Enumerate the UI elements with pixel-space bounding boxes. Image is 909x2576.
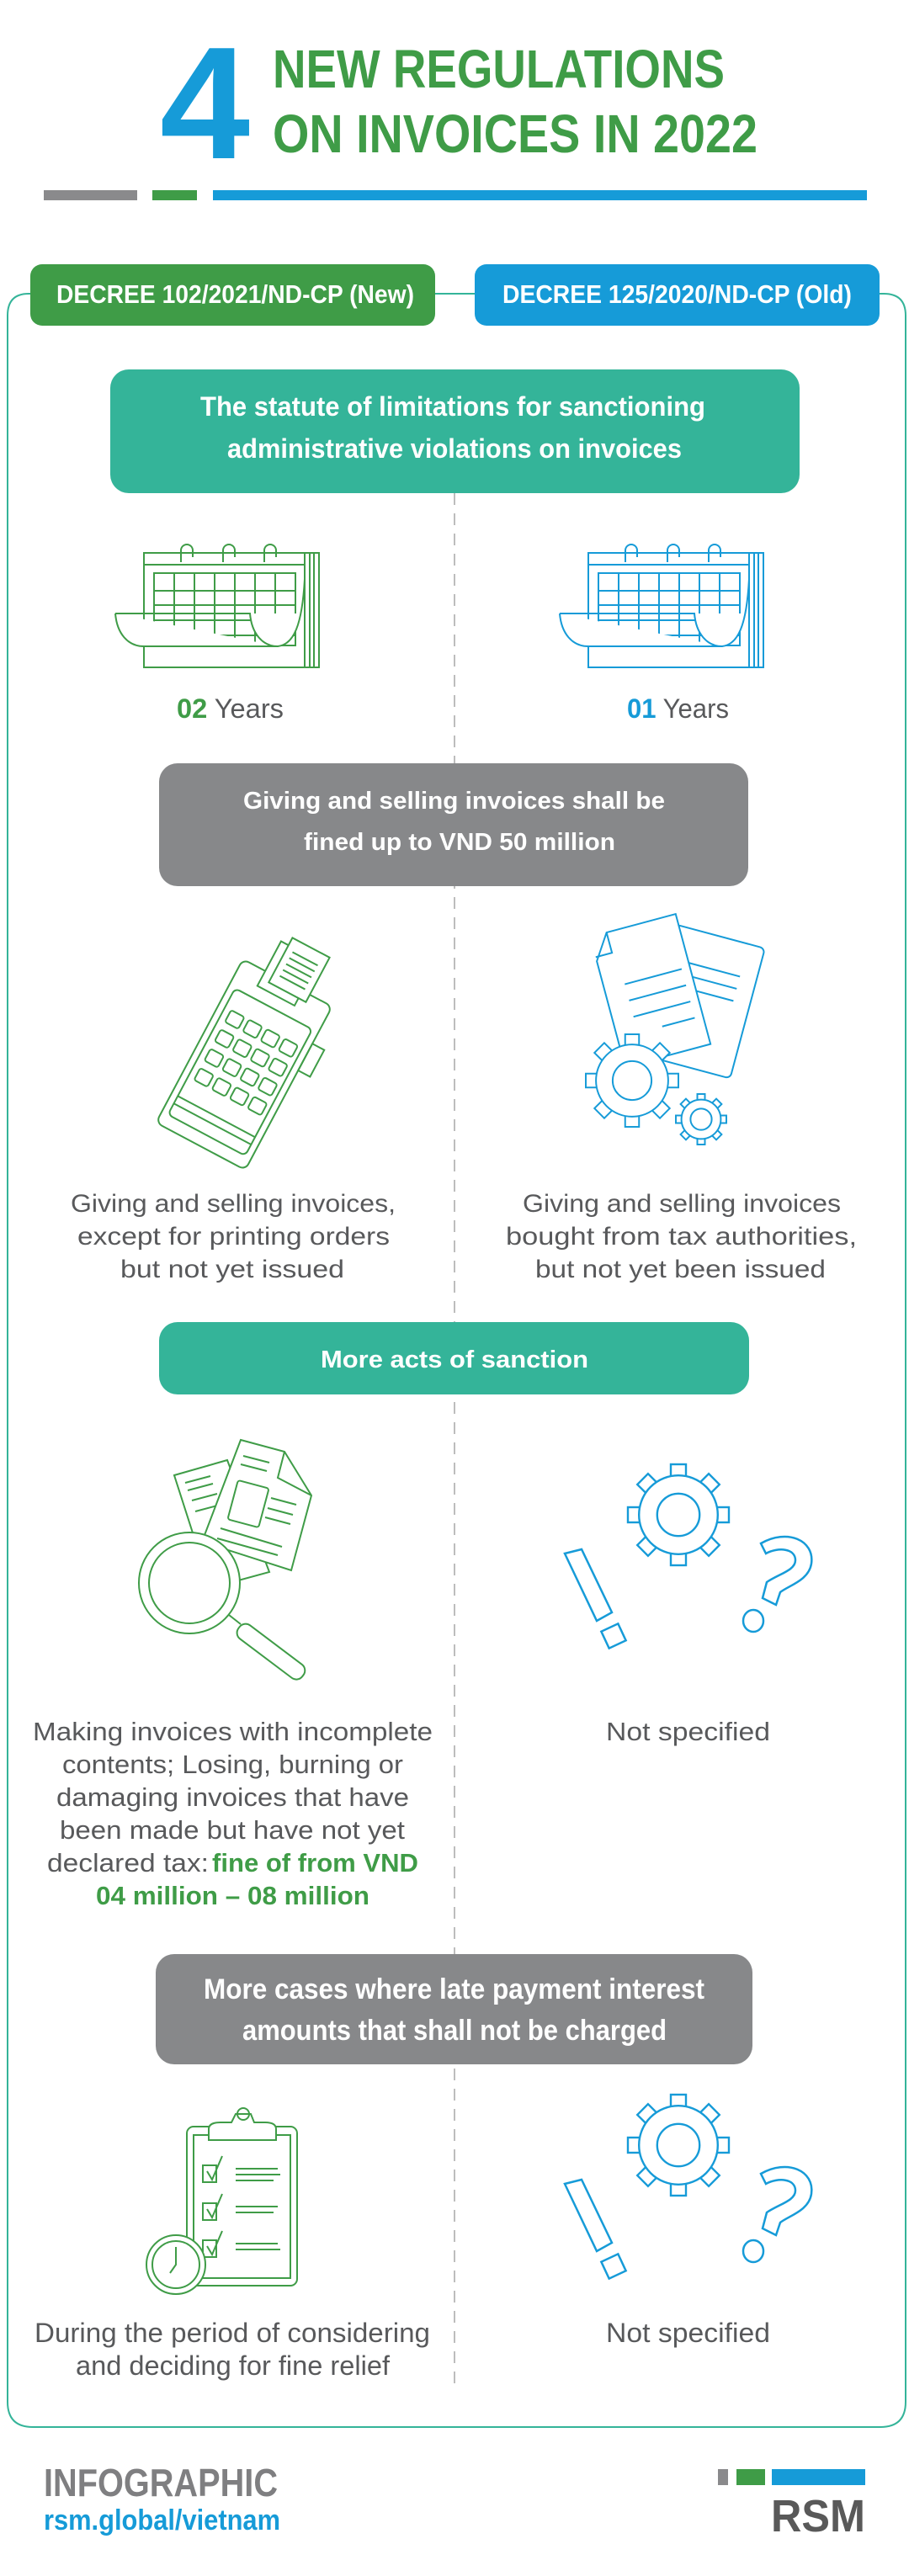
text: giving and selling (old): but not yet been issued [535,1256,826,1283]
footer: infographic label: INFOGRAPHIC [44,2461,278,2504]
logo: RSM: RSM [771,2491,865,2541]
icon: clipboard with clock [146,2108,297,2294]
text: giving and selling (old) [506,1190,857,1283]
heading 1: administrative violations on invoices [227,433,682,464]
icon: magnifier with documents [139,1440,311,1682]
icon: blue calendar [560,544,763,667]
tab: new decree [30,264,435,326]
text: giving and selling (new): but not yet issued [120,1256,344,1283]
logo: RSM [718,2469,865,2541]
icon: calculator [156,922,364,1176]
heading 1 [110,369,800,493]
text: sanction acts (new): contents; Losing, burning or [62,1750,403,1779]
text: not specified (1): Not specified [606,1717,770,1746]
tab: new decree: DECREE 102/2021/ND-CP (New) [56,279,414,309]
text: giving and selling (new): Giving and selling invoices, [71,1190,396,1218]
text: not specified (2): Not specified [606,2318,770,2348]
text: fine relief (new): During the period of considering [35,2318,430,2348]
heading 4: amounts that shall not be charged [242,2015,667,2047]
title number 4: 4 [160,14,250,193]
text: giving and selling (new) [71,1190,396,1283]
icon: gear exclamation question (2) [565,2095,811,2279]
icon: green calendar [115,544,319,667]
text: sanction acts (new): 04 million – 08 million [96,1881,369,1910]
text: fine relief (new): and deciding for fine relief [76,2350,390,2381]
label: 01 years: 01 Years [627,693,729,724]
text: sanction acts (new): declared tax: [47,1848,209,1878]
heading 1: The statute of limitations for sanctioning [200,391,705,422]
text: sanction acts (new) [33,1717,433,1910]
label: 02 years: 02 Years [177,693,284,724]
text: giving and selling (new): except for printing orders [77,1223,390,1251]
text: fine relief (new) [35,2318,430,2381]
icon: gear exclamation question (1) [565,1464,811,1649]
heading 2 [159,763,748,886]
footer: url: rsm.global/vietnam [44,2504,280,2536]
heading 3 [159,1322,749,1394]
heading 2: Giving and selling invoices shall be [243,788,665,815]
tab: old decree: DECREE 125/2020/ND-CP (Old) [502,279,852,309]
title [273,39,758,164]
heading 2: fined up to VND 50 million [304,829,615,856]
heading 3: More acts of sanction [321,1346,588,1373]
text: sanction acts (new): Making invoices with incomplete [33,1717,433,1746]
title: ON INVOICES IN 2022 [273,104,758,164]
heading 4 [156,1954,752,2064]
text: giving and selling (old): bought from tax authorities, [506,1223,857,1251]
text: sanction acts (new): damaging invoices that have [56,1782,409,1812]
icon: documents with gears [586,914,765,1145]
text: giving and selling (old): Giving and selling invoices [523,1190,841,1218]
tab: old decree [475,264,880,326]
heading 4: More cases where late payment interest [204,1973,704,2005]
text: sanction acts (new): been made but have not yet [60,1815,405,1845]
text: sanction acts (new): fine of from VND [212,1848,418,1878]
title: NEW REGULATIONS [273,39,725,99]
